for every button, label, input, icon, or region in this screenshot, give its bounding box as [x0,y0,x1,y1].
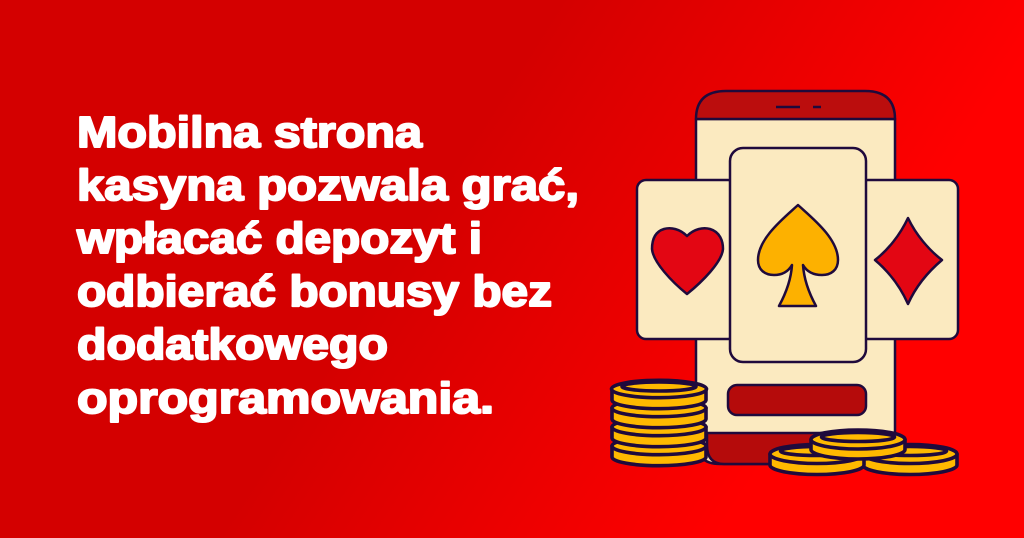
phone top bar [696,91,895,119]
diamond [875,218,942,304]
phone bottom bar [707,433,895,464]
coin lower left [770,444,864,474]
spade [758,205,838,306]
heading text: odbierać bonusy bez [77,267,552,316]
heading text: oprogramowania. [77,374,494,423]
heading text: Mobilna strona [77,108,423,157]
center card [730,148,866,362]
coin far right [863,444,957,474]
phone [696,91,895,464]
heading text: wpłacać depozyt i [76,214,482,263]
heart [652,228,723,294]
right card [859,180,958,339]
left card [637,180,737,339]
heading text: kasyna pozwala grać, [77,161,579,210]
heading text [76,108,579,423]
coin top [811,430,905,459]
heading text: dodatkowego [77,320,388,369]
illustration: phone with cards and coins [612,91,958,474]
phone button [728,385,866,415]
phone speaker [776,106,821,108]
coins right [770,430,957,474]
coin stack left [612,380,706,466]
